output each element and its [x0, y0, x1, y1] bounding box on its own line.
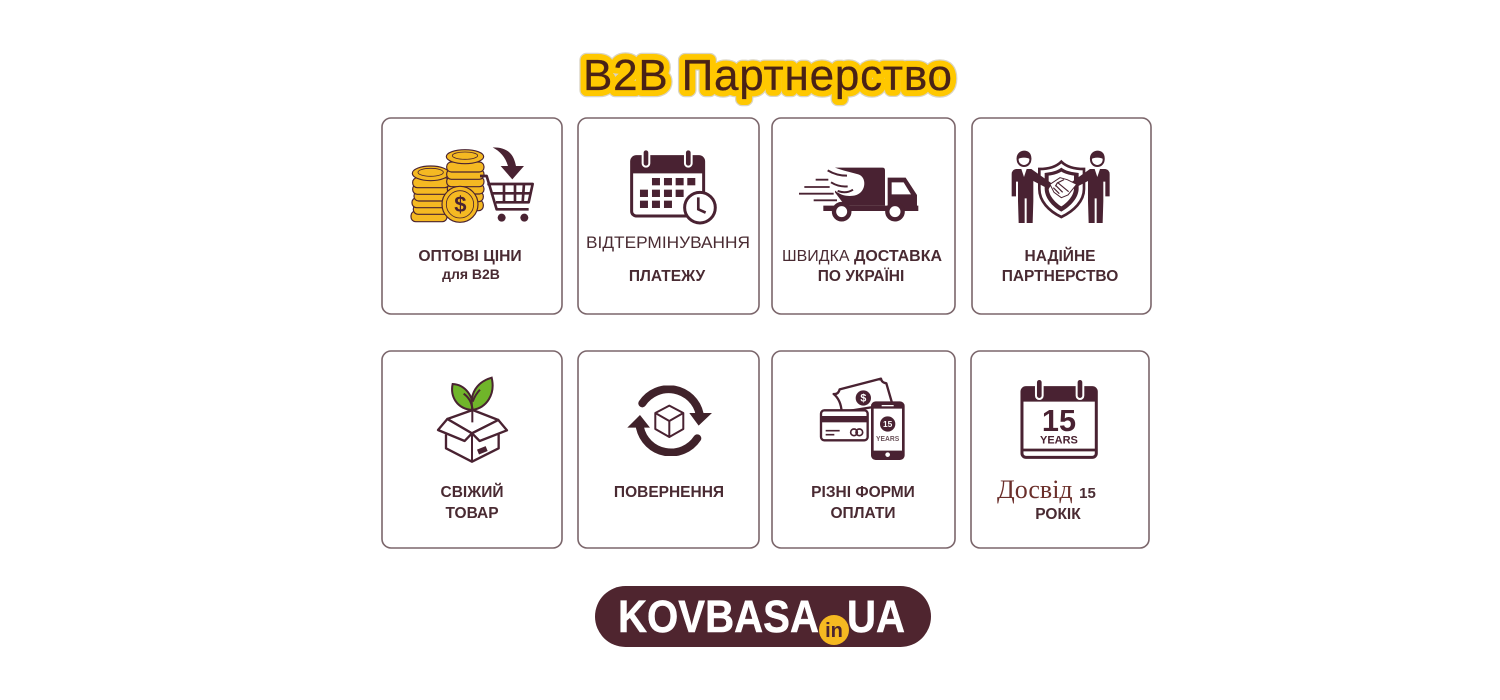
label: fresh: СВІЖИЙ: [441, 483, 503, 501]
label: reliable: НАДІЙНЕ: [1025, 247, 1095, 265]
panel: returns: [578, 351, 759, 548]
icon: box with sprout: [438, 378, 507, 462]
panel: fresh goods: [382, 351, 562, 548]
panel: reliable partnership: [972, 118, 1151, 314]
label: years: РОКІК: [1035, 506, 1081, 523]
icon: cash, card and phone: $: [860, 393, 866, 405]
label: across Ukraine: ПО УКРАЇНІ: [818, 268, 904, 285]
title: B2B Партнерство: [583, 51, 952, 100]
label: experience 15: Досвід 15: [997, 475, 1096, 504]
panel: payment forms: [772, 351, 955, 548]
icon: cash, card and phone: [821, 379, 903, 459]
label: goods: ТОВАР: [445, 505, 499, 522]
logo: KOVBASA.in.UA: in: [825, 620, 843, 642]
icon: calendar with clock: [632, 153, 715, 223]
panel: deferred payment: [578, 118, 759, 314]
logo: KOVBASA.in.UA: UA: [847, 591, 905, 642]
label: deferral: ВІДТЕРМІНУВАННЯ: [586, 234, 750, 252]
label: wholesale prices: ОПТОВІ ЦІНИ: [418, 248, 522, 265]
icon: coins and cart: $: [454, 192, 466, 217]
icon: partners and shield: [1012, 151, 1110, 223]
title: B2B Партнерство: [583, 51, 952, 100]
icon: winged truck: [799, 161, 918, 219]
panel: fast delivery: [772, 118, 955, 314]
icon: cash, card and phone: YEARS: [876, 434, 899, 443]
logo: KOVBASA.in.UA: [595, 586, 931, 647]
icon: calendar 15 years: YEARS: [1040, 434, 1078, 446]
icon: coins and cart: [411, 147, 533, 222]
label: for B2B: для B2B: [442, 266, 500, 282]
logo: KOVBASA.in.UA: KOVBASA: [618, 591, 819, 642]
icon: cash, card and phone: 15: [883, 419, 893, 429]
icon: calendar 15 years: 15: [1042, 404, 1076, 438]
label: fast delivery: ШВИДКА ДОСТАВКА: [782, 248, 942, 265]
label: returns: ПОВЕРНЕННЯ: [614, 484, 724, 501]
panel: 15 years experience: [971, 351, 1149, 548]
title: B2B Партнерство: [583, 51, 952, 100]
icon: return arrows with cube: [627, 389, 712, 453]
label: various forms: РІЗНІ ФОРМИ: [811, 484, 915, 501]
icon: calendar 15 years: [1022, 382, 1096, 457]
panel: wholesale prices: [382, 118, 562, 314]
label: of payment: ОПЛАТИ: [830, 505, 896, 522]
label: partnership: ПАРТНЕРСТВО: [1002, 268, 1118, 285]
label: payment: ПЛАТЕЖУ: [629, 268, 705, 285]
